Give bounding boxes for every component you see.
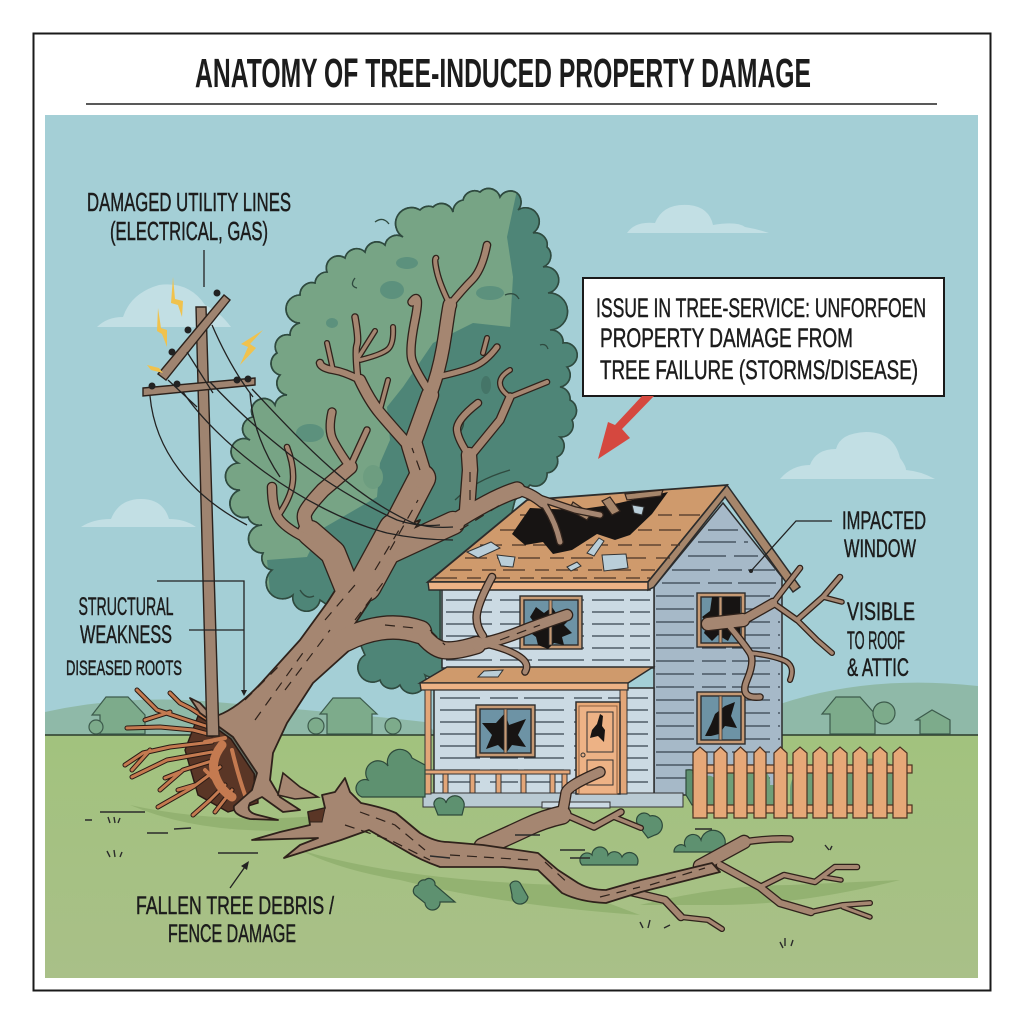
label: damaged utility lines: (ELECTRICAL, GAS): [110, 216, 268, 246]
lightning bolts: [147, 277, 263, 373]
house front upper wall: [442, 587, 654, 668]
arrow: callout to roof: [598, 396, 654, 459]
callout: issue box: PROPERTY DAMAGE FROM: [600, 323, 853, 353]
clouds: [81, 205, 935, 527]
label: impacted window: WINDOW: [844, 535, 916, 563]
ground shadows: [130, 805, 900, 915]
shrubs: [356, 749, 725, 910]
label: structural weakness: DISEASED ROOTS: [66, 657, 182, 680]
bushes behind fence: [699, 758, 905, 812]
fallen tree on ground: [85, 778, 832, 948]
tree canopy: [225, 188, 600, 700]
label: damaged utility lines: DAMAGED UTILITY LINES: [87, 187, 291, 217]
label: visible to roof and attic: VISIBLE: [847, 598, 915, 626]
label: visible to roof and attic: [847, 598, 915, 682]
sky: [45, 115, 978, 740]
house front lower wall: [434, 688, 654, 795]
uprooted roots: [125, 690, 258, 815]
utility pole: [143, 277, 453, 736]
distant houses: [89, 697, 950, 734]
label: impacted window: [749, 507, 926, 573]
label: fallen tree debris: FENCE DAMAGE: [168, 920, 296, 948]
distant hills: [45, 700, 445, 742]
roof hole: [512, 492, 668, 554]
porch: [420, 667, 653, 794]
label: fallen tree debris: FALLEN TREE DEBRIS /: [136, 892, 334, 920]
scene panel: [45, 115, 978, 978]
label: fallen tree debris: [136, 861, 334, 948]
ground: [45, 735, 978, 978]
foundation: [423, 793, 683, 807]
wires: [150, 325, 453, 540]
callout: issue box: [583, 278, 944, 396]
label: impacted window: IMPACTED: [842, 507, 926, 535]
roof: [428, 485, 800, 592]
house side wall: [423, 503, 782, 808]
bark marks: [245, 448, 540, 720]
windows: [476, 593, 745, 794]
grass and debris marks: [85, 812, 832, 948]
label: structural weakness: STRUCTURAL: [78, 593, 174, 621]
main trunk base: [190, 520, 420, 820]
label: visible to roof and attic: & ATTIC: [847, 654, 909, 682]
fence: [693, 747, 912, 818]
label: visible to roof and attic: TO ROOF: [847, 627, 905, 655]
door: [576, 702, 620, 794]
label: damaged utility lines: [87, 187, 291, 287]
label: structural weakness: WEAKNESS: [80, 621, 172, 649]
label: structural weakness: [66, 581, 247, 696]
tree trunk and branches: [190, 245, 870, 929]
